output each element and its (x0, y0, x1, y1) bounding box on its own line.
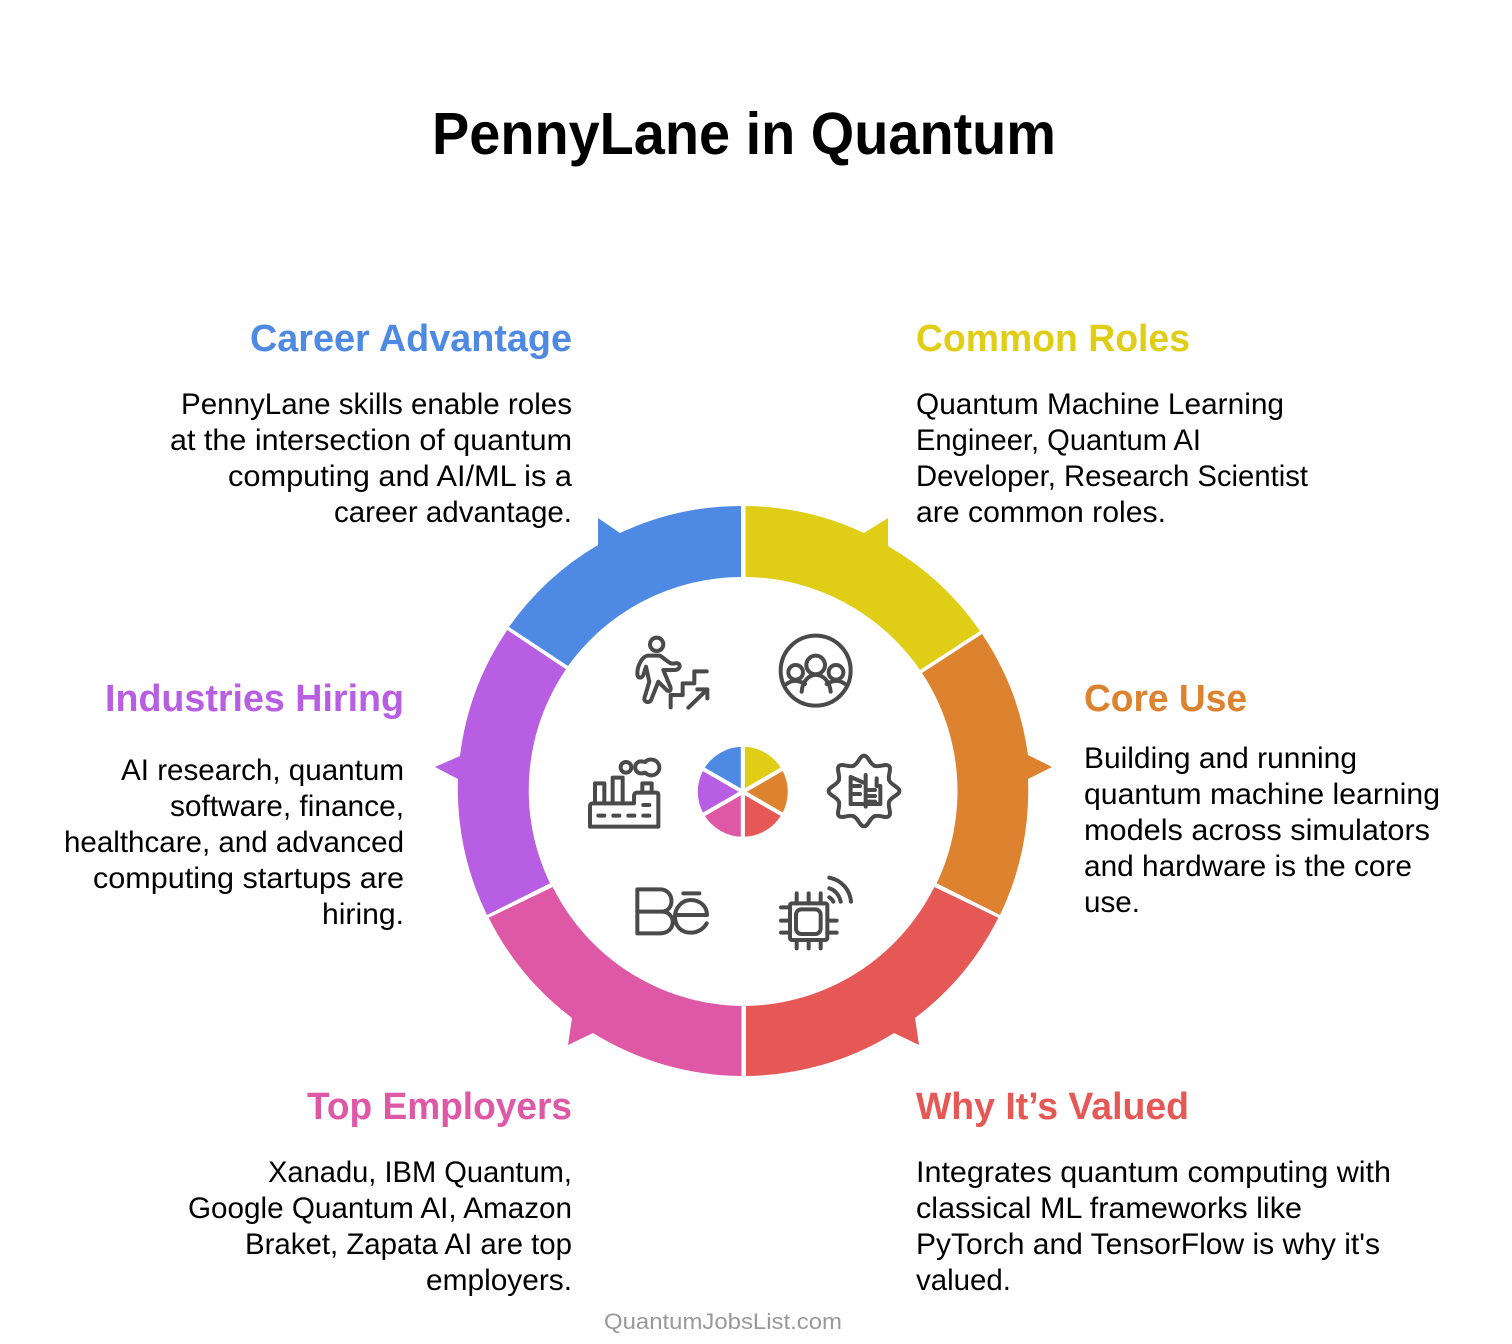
text: common roles description: Developer, Research Scientist (916, 460, 1308, 493)
text: common roles description: are common roles. (916, 496, 1166, 529)
ring segment: blue (509, 506, 741, 666)
text: industries hiring description: healthcare, and advanced (64, 826, 404, 859)
text: common roles description: Quantum Machine Learning (916, 388, 1284, 421)
text: top employers description: Google Quantum AI, Amazon (188, 1192, 572, 1225)
text: core use description: quantum machine learning (1084, 778, 1440, 811)
circular ring diagram (435, 506, 1052, 1076)
ring segment: red (746, 887, 998, 1076)
ring segment: purple (435, 630, 566, 915)
text: why it's valued description: valued. (916, 1264, 1011, 1297)
text: top employers description: Xanadu, IBM Quantum, (268, 1156, 572, 1189)
icon: group of people (781, 636, 851, 706)
ring segment: pink (489, 887, 742, 1076)
text: career advantage description: computing and AI/ML is a (228, 460, 573, 493)
text: core use description: Building and running (1084, 742, 1357, 775)
text: top employers description: employers. (426, 1264, 572, 1297)
text: why it's valued description (916, 1156, 1391, 1297)
panel: career advantage (170, 318, 573, 529)
icon: wireless chip (781, 878, 851, 948)
panel: industries hiring (64, 678, 404, 931)
text: career advantage description (170, 388, 573, 529)
icon: gear with book (829, 756, 899, 826)
heading: core use: Core Use (1084, 678, 1247, 720)
text: industries hiring description: AI research, quantum (121, 754, 404, 787)
text: common roles description (916, 388, 1308, 529)
footer source text: QuantumJobsList.com (604, 1309, 842, 1334)
text: industries hiring description: computing startups are (93, 862, 404, 895)
heading: common roles: Common Roles (916, 318, 1190, 360)
text: career advantage description: at the intersection of quantum (170, 424, 572, 457)
center pie chart (696, 745, 790, 839)
icon: person climbing stairs (637, 638, 707, 708)
text: common roles description: Engineer, Quantum AI (916, 424, 1201, 457)
text: core use description: and hardware is the core (1084, 850, 1412, 883)
icon: factory (590, 760, 659, 827)
text: top employers description (188, 1156, 572, 1297)
text: core use description (1084, 742, 1440, 919)
ring segment: orange (922, 634, 1052, 915)
panel: common roles (916, 318, 1308, 529)
text: why it's valued description: Integrates quantum computing with (916, 1156, 1391, 1189)
text: career advantage description: PennyLane skills enable roles (181, 388, 572, 421)
text: why it's valued description: classical ML frameworks like (916, 1192, 1302, 1225)
panel: why it's valued (916, 1086, 1391, 1297)
heading: career advantage: Career Advantage (250, 318, 572, 360)
text: industries hiring description: hiring. (322, 898, 404, 931)
heading: top employers: Top Employers (307, 1086, 572, 1128)
text: why it's valued description: PyTorch and TensorFlow is why it's (916, 1228, 1380, 1261)
panel: top employers (188, 1086, 572, 1297)
heading: industries hiring: Industries Hiring (105, 678, 404, 720)
icon: behance logo (637, 889, 707, 933)
text: top employers description: Braket, Zapata AI are top (245, 1228, 572, 1261)
text: core use description: models across simulators (1084, 814, 1430, 847)
panel: core use (1084, 678, 1440, 919)
heading: why it's valued: Why It’s Valued (916, 1086, 1189, 1128)
text: core use description: use. (1084, 886, 1140, 919)
title: PennyLane in Quantum (432, 101, 1056, 167)
text: career advantage description: career advantage. (334, 496, 572, 529)
text: industries hiring description (64, 754, 404, 931)
text: industries hiring description: software, finance, (170, 790, 404, 823)
ring segment: yellow (746, 506, 980, 670)
icon group wrapper (590, 636, 899, 948)
